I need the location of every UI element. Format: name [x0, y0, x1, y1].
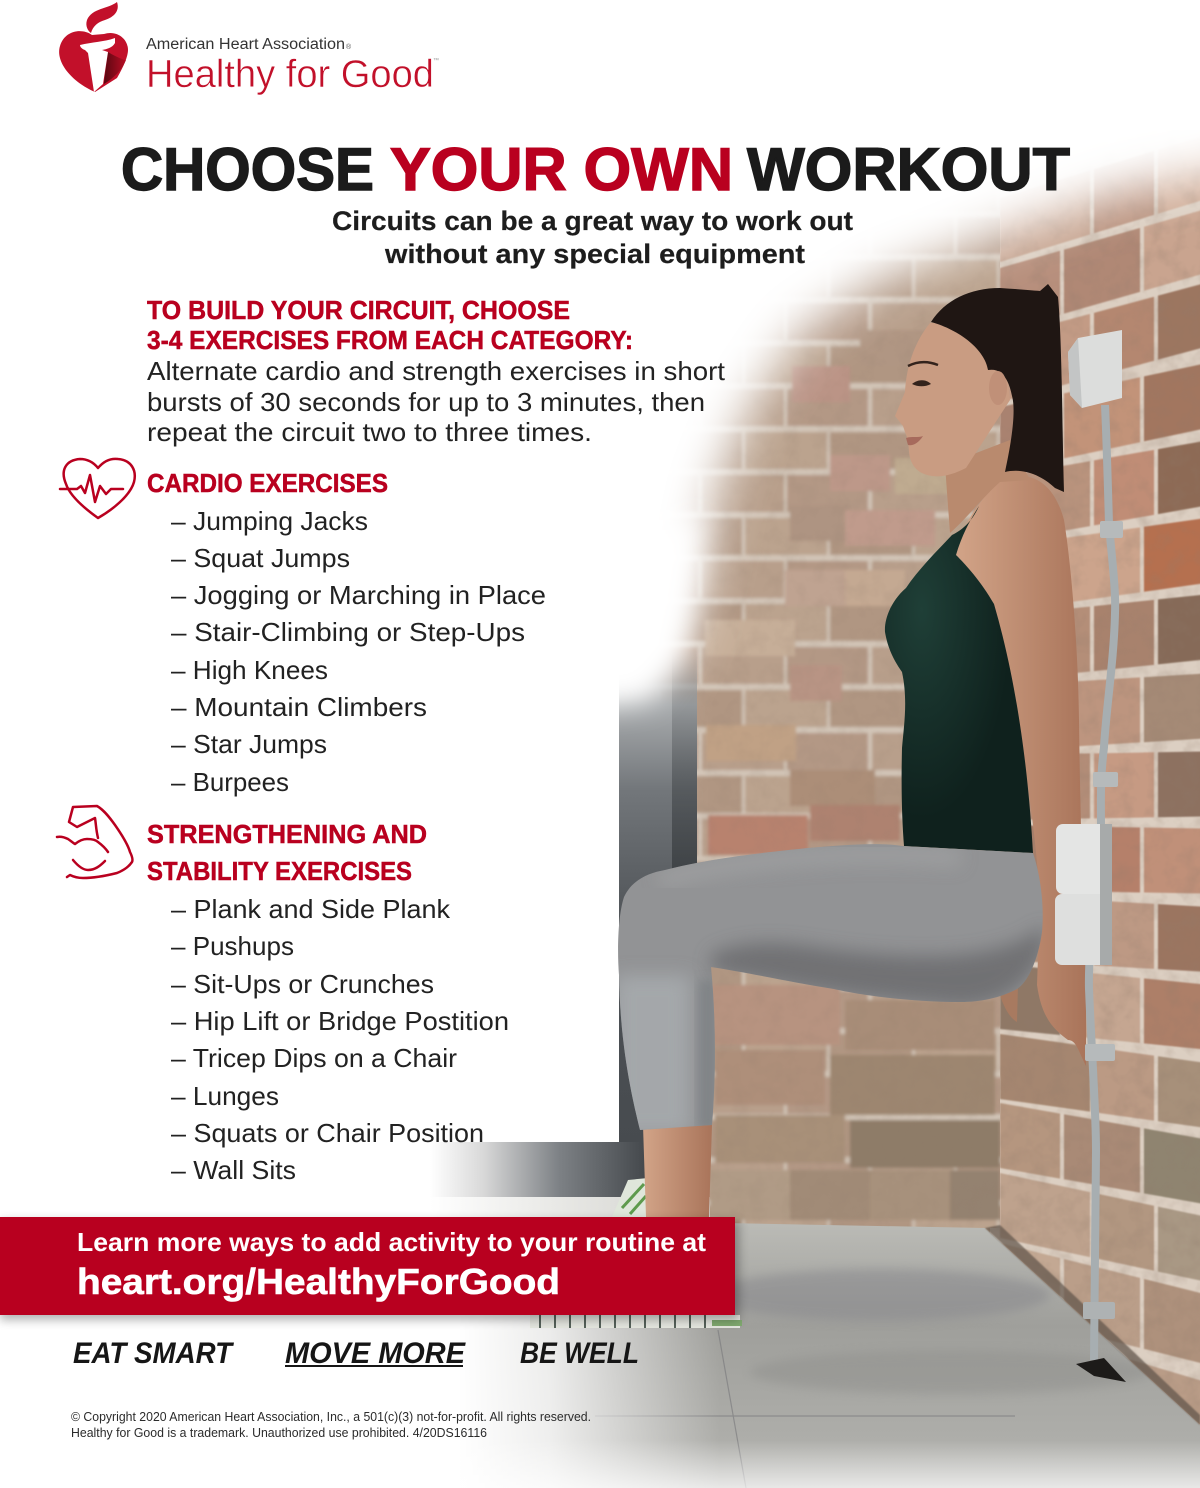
icon: heart with pulse: [60, 459, 135, 518]
strengthening and stability exercises list: [147, 819, 509, 1185]
call-to-action banner: Learn more ways to add activity to your routine at: [77, 1227, 706, 1257]
instructions: 3-4 EXERCISES FROM EACH CATEGORY:: [147, 325, 633, 355]
second hand behind thigh: [1000, 985, 1018, 1022]
cardio exercises list: – Burpees: [171, 767, 289, 797]
tagline: [73, 1337, 639, 1370]
icon: flexed arm: [57, 806, 132, 878]
window frame: [0, 620, 710, 1219]
strengthening and stability exercises list: – Tricep Dips on a Chair: [171, 1043, 457, 1073]
strengthening and stability exercises list: STRENGTHENING AND: [147, 819, 427, 849]
subtitle: Circuits can be a great way to work out: [332, 206, 853, 236]
call-to-action banner: heart.org/HealthyForGood: [77, 1261, 560, 1302]
lower wall sockets: [1055, 824, 1112, 965]
title: [121, 136, 1070, 203]
instructions: bursts of 30 seconds for up to 3 minutes, then: [147, 387, 705, 417]
strengthening and stability exercises list: – Pushups: [171, 931, 294, 961]
logo: American Heart Association Healthy for Good: [59, 2, 439, 96]
soft fade over top of window frame: [570, 520, 700, 710]
cable with clips: [1076, 405, 1126, 1382]
copyright: © Copyright 2020 American Heart Association, Inc., a 501(c)(3) not-for-profit. All rights reserved.: [71, 1409, 591, 1424]
strengthening and stability exercises list: STABILITY EXERCISES: [147, 856, 412, 886]
strengthening and stability exercises list: – Squats or Chair Position: [171, 1118, 484, 1148]
strengthening and stability exercises list: – Plank and Side Plank: [171, 894, 451, 924]
cardio exercises list: – Star Jumps: [171, 729, 327, 759]
subtitle: [332, 206, 853, 269]
instructions: repeat the circuit two to three times.: [147, 417, 592, 447]
upper wall socket: [1068, 330, 1122, 408]
icon: heart and torch: [59, 2, 128, 92]
floor: [0, 1215, 1200, 1488]
neck: [945, 440, 1030, 533]
title: YOUR OWN: [390, 136, 733, 203]
instructions: Alternate cardio and strength exercises in short: [147, 356, 726, 386]
leggings: [610, 840, 1050, 1140]
cardio exercises list: – Squat Jumps: [171, 543, 350, 573]
cardio exercises list: – Mountain Climbers: [171, 692, 427, 722]
instructions: TO BUILD YOUR CIRCUIT, CHOOSE: [147, 295, 570, 325]
title: CHOOSE: [121, 136, 374, 203]
cardio exercises list: – High Knees: [171, 655, 328, 685]
photo: woman doing a wall sit: [530, 284, 1126, 1382]
background photo: brick walls, window and floor: [441, 144, 1200, 1488]
logo text: American Heart Association: [146, 36, 345, 53]
hair: [931, 284, 1064, 492]
strengthening and stability exercises list: – Sit-Ups or Crunches: [171, 969, 434, 999]
tagline: BE WELL: [520, 1337, 639, 1370]
copyright: [71, 1409, 591, 1440]
strengthening and stability exercises list: – Hip Lift or Bridge Postition: [171, 1006, 509, 1036]
cardio exercises list: CARDIO EXERCISES: [147, 468, 388, 498]
instructions: [147, 295, 726, 447]
cardio exercises list: – Jumping Jacks: [171, 506, 368, 536]
cardio exercises list: – Jogging or Marching in Place: [171, 580, 546, 610]
shoe: [530, 1178, 742, 1328]
lower leg: [643, 1125, 712, 1217]
arm and hand: [956, 476, 1086, 1066]
logo: American Heart Association Healthy for Good: ®: [346, 43, 352, 51]
tank top: [885, 506, 1033, 853]
subtitle: without any special equipment: [384, 239, 805, 269]
strengthening and stability exercises list: – Lunges: [171, 1081, 279, 1111]
logo: American Heart Association Healthy for Good: Healthy for Good: [146, 53, 434, 96]
white fade over top and left of photo: [0, 0, 1200, 1140]
strengthening and stability exercises list: – Wall Sits: [171, 1155, 296, 1185]
logo: American Heart Association Healthy for Good: ™: [433, 57, 439, 64]
tagline: MOVE MORE: [285, 1337, 466, 1370]
cardio exercises list: [147, 468, 546, 797]
call-to-action banner: [0, 1217, 739, 1320]
right brick wall: [990, 130, 1200, 1488]
ear: [989, 371, 1007, 405]
face: [895, 320, 1010, 476]
tagline: EAT SMART: [73, 1337, 234, 1370]
title: WORKOUT: [747, 136, 1070, 203]
copyright: Healthy for Good is a trademark. Unauthorized use prohibited. 4/20DS16116: [71, 1425, 487, 1440]
back brick wall: [600, 120, 1020, 1235]
cardio exercises list: – Stair-Climbing or Step-Ups: [171, 617, 525, 647]
